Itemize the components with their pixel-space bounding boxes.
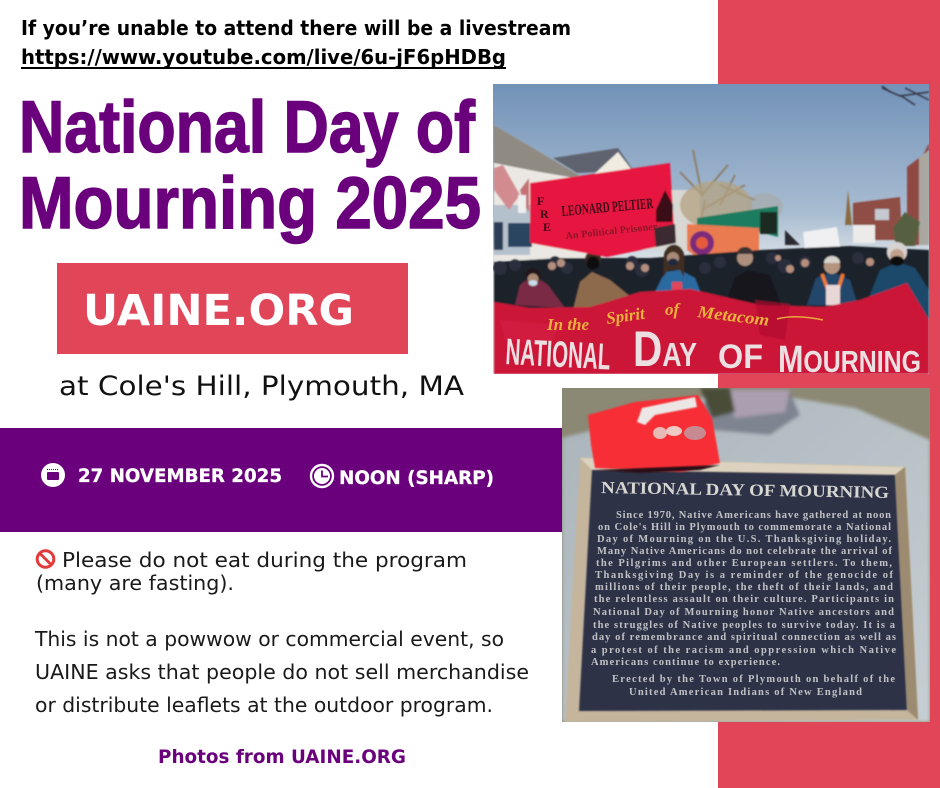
panel: date and time band [0, 428, 562, 532]
plaque text: Erected by the Town of Plymouth on behalf of the [612, 674, 895, 685]
plaque text: United American Indians of New England [629, 687, 862, 698]
time: NOON (SHARP) [339, 467, 494, 489]
banner text: R [540, 207, 549, 221]
banner text [537, 194, 658, 242]
organizer badge: UAINE.ORG [83, 286, 354, 336]
plaque text: Day of Mourning on the U.S. Thanksgiving holiday. [597, 534, 891, 545]
icon: clock [311, 465, 333, 487]
title: Mourning 2025 [19, 163, 481, 244]
plaque text: the relentless assault on their culture. Participants in [594, 594, 894, 605]
photo: march with banners: NATIONAL [505, 331, 612, 377]
plaque text: Many Native Americans do not celebrate the arrival of [597, 546, 892, 557]
plaque text: the Pilgrims and other European settlers. To them, [596, 558, 892, 569]
livestream notice: https://www.youtube.com/live/6u-jF6pHDBg [21, 45, 506, 69]
livestream notice [21, 16, 571, 69]
eating notice: Please do not eat during the program [62, 548, 467, 572]
icon: calendar [41, 463, 65, 487]
red cloth [588, 395, 720, 472]
conduct notice: This is not a powwow or commercial event, so [34, 627, 504, 651]
plaque text [591, 478, 896, 698]
eating notice: (many are fasting). [36, 571, 234, 595]
photo: march with banners: Spirit [605, 304, 647, 328]
photo: march with banners: OF [718, 338, 763, 376]
photo: march with banners: of [665, 300, 682, 319]
plaque text: Thanksgiving Day is a reminder of the genocide of [595, 570, 894, 581]
photo: memorial plaque [562, 388, 930, 722]
plaque text: a protest of the racism and oppression which Native [591, 645, 896, 656]
plaque text: National Day of Mourning honor Native ancestors and [593, 607, 894, 618]
banner text: F [537, 194, 544, 208]
plaque face [579, 470, 907, 711]
conduct notice: or distribute leaflets at the outdoor program. [35, 693, 493, 717]
location: at Cole's Hill, Plymouth, MA [59, 371, 465, 402]
organizer badge [57, 263, 408, 354]
photo credit: Photos from UAINE.ORG [158, 746, 406, 768]
plaque text: Since 1970, Native Americans have gathered at noon [616, 510, 891, 521]
plaque frame [565, 458, 918, 722]
banner text: E [543, 220, 551, 234]
icon: prohibited [37, 551, 54, 567]
title [19, 87, 481, 244]
photo: march with banners: In the [546, 315, 589, 334]
plaque text: on Cole's Hill in Plymouth to commemorate a National [598, 522, 891, 533]
banner text: LEONARD PELTIER [561, 196, 654, 220]
photo: march with banners: Metacom [695, 302, 770, 330]
photo: march with banners [493, 84, 929, 381]
conduct notice: UAINE asks that people do not sell merchandise [35, 660, 529, 684]
banner text: An Political Prisoner [565, 221, 658, 242]
plaque text: millions of their people, the theft of their lands, and [595, 582, 893, 593]
title: National Day of [19, 87, 476, 168]
plaque text: Americans continue to experience. [591, 657, 780, 668]
photo: march with banners: DAY [633, 321, 697, 377]
conduct notice [34, 627, 529, 717]
plaque text: NATIONAL DAY OF MOURNING [601, 478, 889, 502]
plaque text: the struggles of Native peoples to survive today. It is a [593, 620, 896, 631]
panel: red side band [718, 0, 940, 788]
livestream notice: If you’re unable to attend there will be a livestream [21, 16, 571, 40]
eating notice [36, 548, 467, 595]
date: 27 NOVEMBER 2025 [78, 465, 282, 487]
plaque text: day of remembrance and spiritual connection as well as [592, 632, 896, 643]
